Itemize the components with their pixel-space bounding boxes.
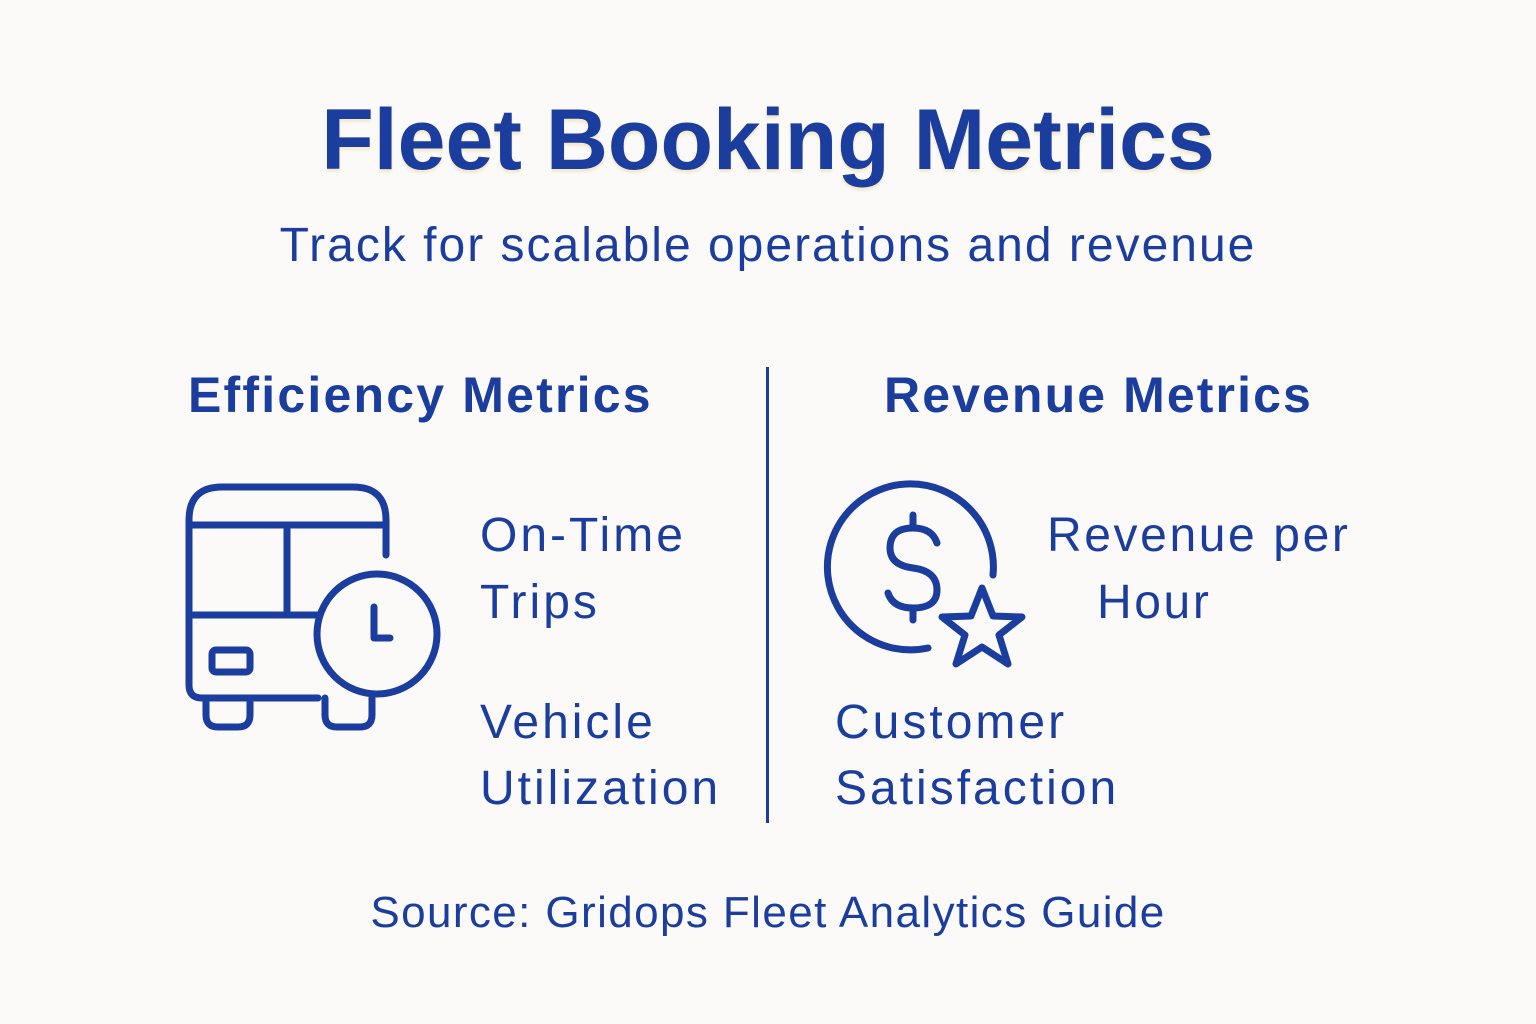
heading: efficiency metrics: Efficiency Metrics: [188, 367, 653, 423]
heading: revenue metrics: Revenue Metrics: [884, 367, 1313, 423]
label: vehicle utilization: Utilization: [480, 762, 721, 815]
label: on-time trips: Trips: [480, 576, 600, 629]
icon: dollar with star: [824, 480, 1026, 668]
icon: bus with clock: [186, 484, 440, 730]
label: customer satisfaction: [835, 696, 1119, 815]
label: customer satisfaction: Satisfaction: [835, 762, 1119, 815]
label: customer satisfaction: Customer: [835, 696, 1067, 749]
label: on-time trips: [480, 509, 686, 629]
divider: [766, 367, 769, 823]
label: on-time trips: On-Time: [480, 509, 686, 562]
label: vehicle utilization: [480, 696, 721, 815]
title: Fleet Booking Metrics: [321, 92, 1215, 188]
label: revenue per hour: Hour: [1097, 576, 1211, 629]
source: Source: Gridops Fleet Analytics Guide: [370, 888, 1166, 937]
label: revenue per hour: [1047, 509, 1350, 629]
label: revenue per hour: Revenue per: [1047, 509, 1350, 562]
subtitle: Track for scalable operations and revenue: [280, 219, 1256, 272]
label: vehicle utilization: Vehicle: [480, 696, 656, 749]
